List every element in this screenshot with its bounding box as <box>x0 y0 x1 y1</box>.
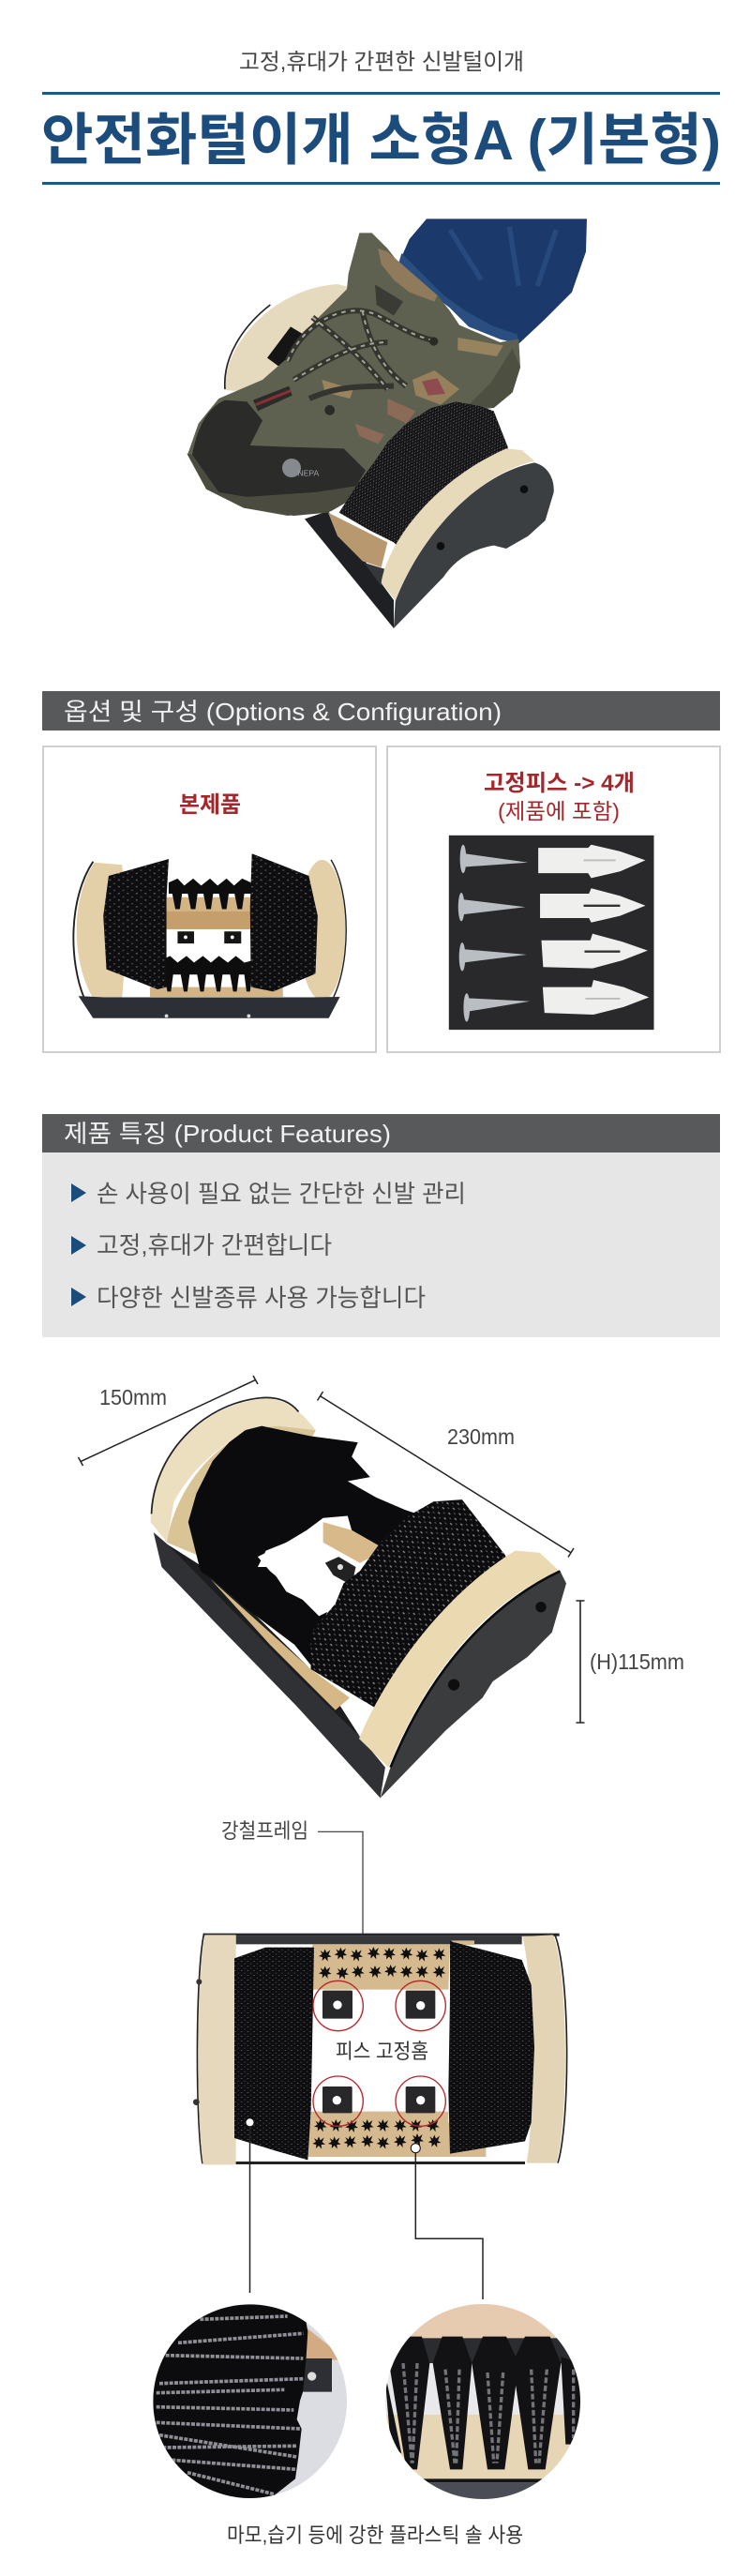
callout markers <box>246 2118 420 2153</box>
panel: fixing screws <box>387 746 720 1052</box>
label: fixing holes: 피스 고정홈 <box>336 2040 428 2063</box>
jeans <box>398 218 587 344</box>
front wood disc <box>382 448 534 600</box>
fixing holes <box>313 1981 445 2126</box>
screws and anchors photo <box>449 836 653 1030</box>
wood end caps <box>197 1934 204 2163</box>
label: steel frame: 강철프레임 <box>221 1819 308 1843</box>
feature 3: 다양한 신발종류 사용 가능합니다 <box>97 1284 426 1312</box>
brush blocks <box>234 1948 314 2160</box>
detail diagram: top view <box>150 1819 581 2547</box>
panel: main product <box>43 746 376 1052</box>
hero photo: boot on brush <box>187 218 587 628</box>
feature 2: 고정,휴대가 간편합니다 <box>97 1231 332 1259</box>
black end plate <box>394 462 554 628</box>
laces <box>288 310 434 399</box>
callout leaders <box>249 2122 483 2299</box>
dimension line: height <box>576 1601 585 1723</box>
boot upper <box>188 233 520 516</box>
dimension line: width <box>79 1376 258 1466</box>
product photo front view <box>73 853 346 1018</box>
title: 안전화털이개 소형A (기본형) <box>41 109 721 172</box>
hero photo: boot on brush: NEPA <box>297 469 319 478</box>
dimension label: height: (H)115mm <box>590 1650 684 1674</box>
product photo with dimensions <box>79 1376 684 1798</box>
bristle tufts <box>312 1947 445 2149</box>
back wood disc <box>224 284 368 392</box>
product photo angled <box>151 1397 566 1798</box>
closeup: base bristles <box>384 2302 581 2501</box>
closeup: side bristles <box>150 2300 350 2502</box>
subtitle: 고정,휴대가 간편한 신발털이개 <box>239 50 524 75</box>
panel: feature list <box>42 1152 720 1337</box>
panel note: (제품에 포함) <box>498 799 620 823</box>
dimension label: width: 150mm <box>99 1385 167 1409</box>
dimension label: length: 230mm <box>447 1424 515 1449</box>
panel heading: 본제품 <box>179 792 241 818</box>
panel heading: 고정피스 -> 4개 <box>484 771 635 796</box>
brush bristles <box>339 401 508 555</box>
section header: options: 옵션 및 구성 (Options & Configuration) <box>64 698 502 726</box>
section header: features <box>42 1114 720 1152</box>
toe cap <box>192 400 366 497</box>
leader: steel frame <box>318 1831 363 1935</box>
sole <box>187 453 356 516</box>
closeup circles <box>150 2300 581 2502</box>
front base <box>305 511 394 628</box>
logo <box>282 459 301 477</box>
section header: features: 제품 특징 (Product Features) <box>64 1120 391 1148</box>
title block <box>41 92 721 185</box>
caption: 마모,습기 등에 강한 플라스틱 솔 사용 <box>227 2523 523 2547</box>
section header: options <box>42 691 720 731</box>
product photo top view <box>193 1934 567 2164</box>
feature 1: 손 사용이 필요 없는 간단한 신발 관리 <box>97 1180 466 1208</box>
dimension line: length <box>317 1392 574 1557</box>
